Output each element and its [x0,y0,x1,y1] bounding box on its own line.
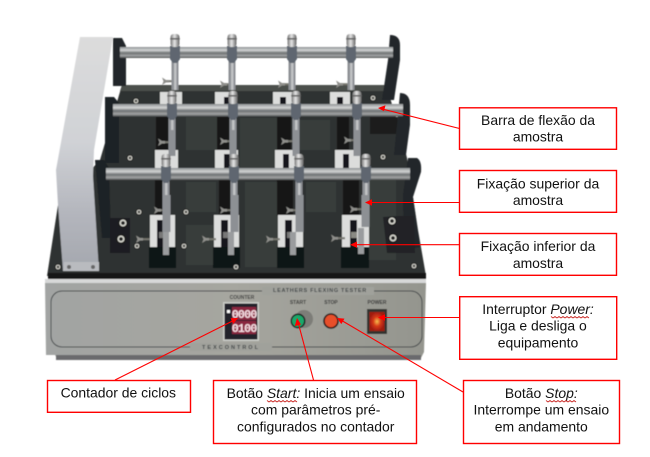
callout: botão start: configurados no contador [237,418,395,434]
callout: botão stop: em andamento [495,418,588,434]
deck screws [55,95,417,270]
start button [290,300,313,328]
callout: botão stop: Interrompe um ensaio [474,402,609,418]
middle bar with clamps [113,91,403,156]
wing nuts [136,78,364,243]
cycle counter display: 0100 [232,322,257,336]
front bar with clamps [106,154,410,255]
callout: botão stop [464,380,620,444]
callout: barra de flexão: amostra [513,129,563,145]
arrow: upper clamp [365,199,460,206]
front uprights and mounting blocks [95,158,421,253]
back bar with clamps [120,34,393,90]
callout: fixação inferior [460,234,616,275]
arrow: stop button [337,318,463,392]
stainless control panel [45,279,426,360]
callout: botão start: com parâmetros pré- [251,402,381,418]
callout: interruptor power: equipamento [498,334,579,350]
callout: fixação superior: Fixação superior da [477,175,599,191]
callout: fixação superior [460,170,616,212]
power switch [367,300,387,334]
callout: fixação superior: amostra [513,192,563,208]
middle row clamp blocks [155,117,360,168]
back row clamp blocks [160,92,350,105]
cycle counter display [223,295,259,341]
stainless control panel: TEXCONTROL [202,345,260,351]
arrow: cycle counter [115,318,238,380]
stainless control panel: LEATHERS FLEXING TESTER [273,288,367,294]
callout: botão start [214,380,416,444]
power switch: POWER [368,300,387,306]
stop button [323,300,339,329]
arrow: power switch [378,314,460,321]
callout: contador de ciclos: Contador de ciclos [61,385,176,401]
callout: barra de flexão [460,108,616,149]
back uprights [113,35,400,100]
callout: interruptor power: Liga e desliga o [489,318,587,334]
cycle counter display: 0000 [232,308,257,322]
callout: interruptor power [460,297,617,359]
callout: botão start: Botão Start: Inicia um ensaio [227,385,405,401]
callout: barra de flexão: Barra de flexão da [481,112,595,128]
callout: fixação inferior: amostra [513,255,563,271]
callout: botão stop: Botão Stop: [505,385,578,401]
silver side arm [56,37,113,271]
start button: START [290,300,306,306]
arrow: bending bar [378,105,460,128]
cycle counter display: COUNTER [230,295,255,301]
deck plate [47,85,426,279]
stop button: STOP [324,300,338,306]
arrow: start button [295,318,314,380]
middle uprights [105,93,410,163]
callout: interruptor power: Interruptor Power: [482,301,594,317]
arrow: lower clamp [350,242,460,248]
callout: contador de ciclos [48,380,190,412]
front row clamp blocks [149,180,369,268]
machine photograph: flexing tester [45,34,426,360]
callout: fixação inferior: Fixação inferior da [481,238,596,254]
